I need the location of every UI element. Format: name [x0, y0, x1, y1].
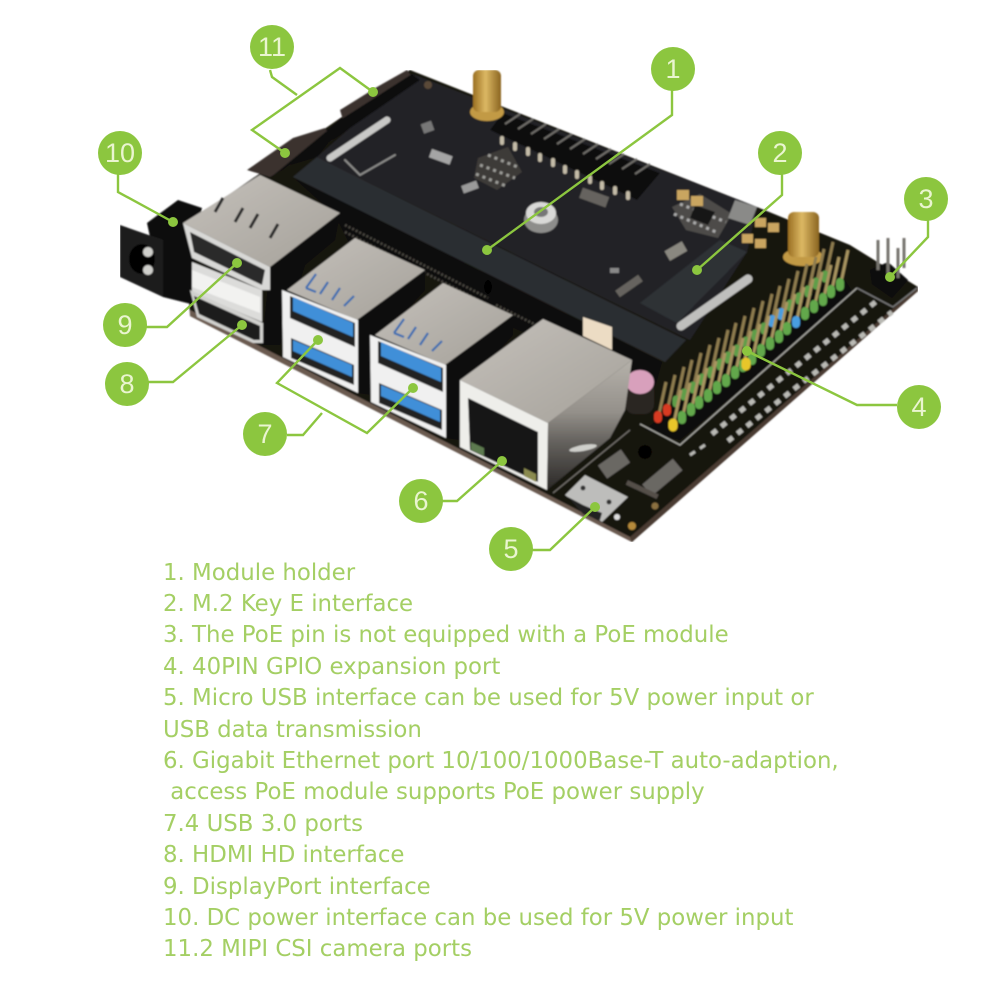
leader end dots	[168, 87, 895, 512]
standoffs	[470, 70, 823, 266]
silk labels	[690, 300, 892, 455]
fan connector	[583, 317, 612, 350]
DisplayPort and HDMI	[183, 175, 340, 345]
callout numbers: 1	[665, 54, 681, 84]
callout numbers: 9	[117, 310, 133, 340]
leader lines	[118, 68, 928, 550]
GPIO pins	[658, 242, 848, 427]
callout badges	[98, 25, 948, 571]
micro USB	[565, 475, 628, 522]
USB stack right	[370, 283, 513, 440]
feature list: 1. Module holder 2. M.2 Key E interface 3. The PoE pin is not equipped with a PoE module 4. 40PIN GPIO expansion port 5. Micro USB interface can be used for 5V power input or USB data transmission 6. Gigabit Ethernet port 10/100/1000Base-T auto-adaption, access PoE module supports PoE power supply 7.4 USB 3.0 ports 8. HDMI HD interface 9. DisplayPort interface 10. DC power interface can be used for 5V power input 11.2 MIPI CSI camera ports	[163, 560, 839, 962]
small board parts	[553, 430, 682, 530]
callout numbers: 11	[258, 32, 286, 62]
GPIO base and outline	[640, 272, 917, 445]
metal clips	[330, 120, 748, 326]
PoE pins	[870, 238, 908, 298]
module board	[270, 74, 757, 340]
screw	[524, 202, 558, 233]
callout numbers: 3	[918, 184, 934, 214]
carrier PCB	[185, 70, 918, 542]
photo of the board	[120, 70, 918, 542]
callout numbers: 6	[413, 486, 429, 516]
callout numbers: 4	[911, 392, 927, 422]
USB stack left	[282, 238, 425, 395]
module holder strip	[293, 157, 686, 405]
callout numbers: 2	[772, 138, 788, 168]
Ethernet jack	[460, 319, 632, 490]
capacitor	[625, 370, 654, 414]
callout numbers: 8	[119, 369, 135, 399]
callout numbers: 5	[503, 534, 519, 564]
DC jack	[120, 200, 202, 305]
module components	[421, 81, 779, 297]
module header	[490, 113, 660, 200]
M.2 slot	[640, 240, 747, 323]
callout numbers: 7	[257, 419, 273, 449]
callout numbers: 10	[105, 138, 135, 168]
CSI connectors	[247, 70, 413, 177]
callout numbers	[105, 32, 934, 564]
